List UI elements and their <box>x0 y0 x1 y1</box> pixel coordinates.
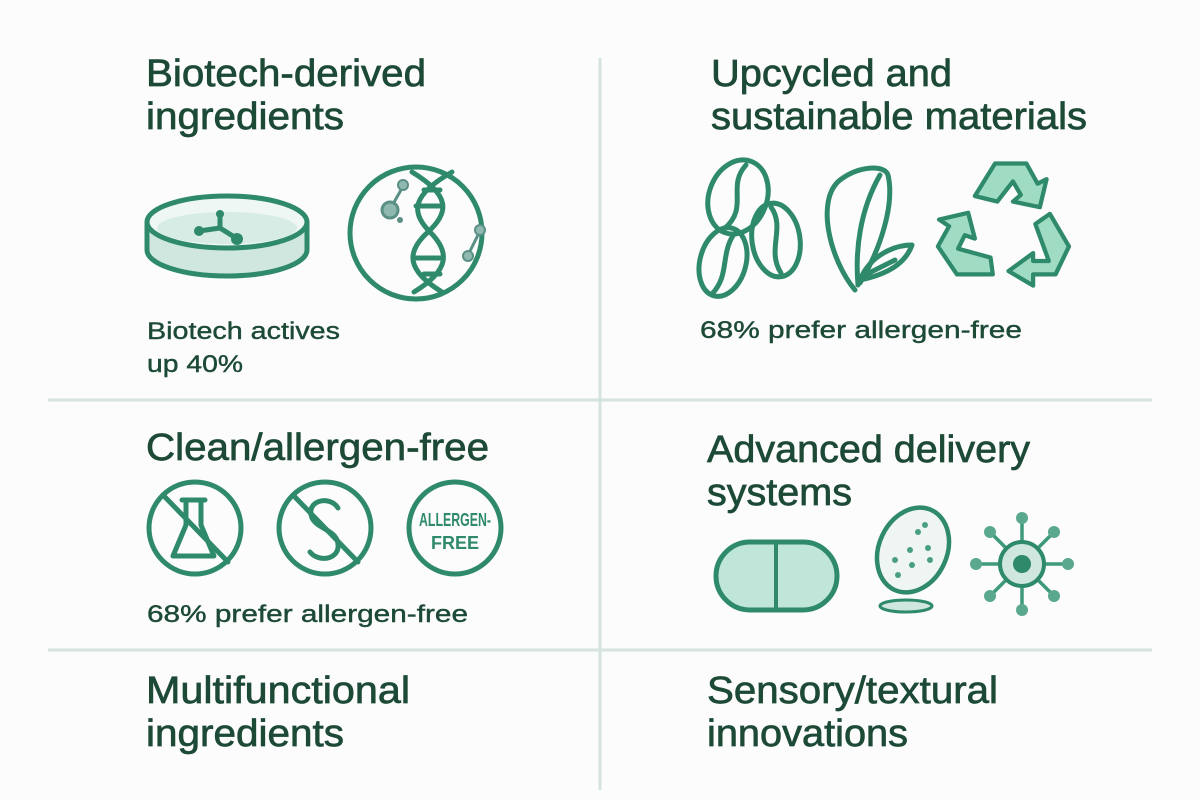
icon: no sulfates <box>279 482 371 574</box>
stat: 68% prefer allergen-free <box>147 601 468 628</box>
panel: biotech-derived ingredients <box>146 53 485 378</box>
heading: sensory: innovations <box>707 713 908 755</box>
icon: recycle <box>938 164 1069 286</box>
icon: no chemicals <box>149 482 241 574</box>
icon: capsule particle <box>864 496 962 612</box>
heading: clean: Clean/allergen-free <box>146 427 489 469</box>
panel: sensory/textural innovations <box>707 670 998 755</box>
stat: biotech actives: up 40% <box>147 351 243 378</box>
icon: DNA circle <box>350 167 485 299</box>
heading: upcycled: Upcycled and <box>711 53 952 95</box>
heading: multifunctional: Multifunctional <box>146 670 410 712</box>
icon: pill <box>716 542 837 610</box>
stat: 68% prefer allergen-free: 68% prefer allergen-free <box>700 317 1022 344</box>
heading: advanced delivery: systems <box>707 472 852 514</box>
heading: sensory: Sensory/textural <box>707 670 998 712</box>
panel: advanced delivery systems <box>707 429 1074 616</box>
icon: petri dish <box>147 196 307 276</box>
stat: biotech actives: Biotech actives <box>147 318 340 345</box>
icon: nanoparticle <box>970 512 1074 616</box>
icon: allergen-free badge: ALLERGEN- <box>419 510 491 530</box>
heading: multifunctional: ingredients <box>146 713 344 755</box>
icon: allergen-free badge <box>409 482 501 574</box>
icon: allergen-free badge: FREE <box>431 533 479 553</box>
icon: coffee beans <box>692 151 805 302</box>
heading: biotech-derived ingredients: Biotech-derived <box>146 53 426 95</box>
heading: upcycled: sustainable materials <box>711 96 1087 138</box>
panel: multifunctional ingredients <box>146 670 410 755</box>
icon: leaf <box>827 168 912 290</box>
panel: upcycled and sustainable materials <box>692 53 1087 344</box>
heading: advanced delivery: Advanced delivery <box>707 429 1030 471</box>
heading: biotech-derived ingredients: ingredients <box>146 96 344 138</box>
panel: clean/allergen-free <box>146 427 501 628</box>
